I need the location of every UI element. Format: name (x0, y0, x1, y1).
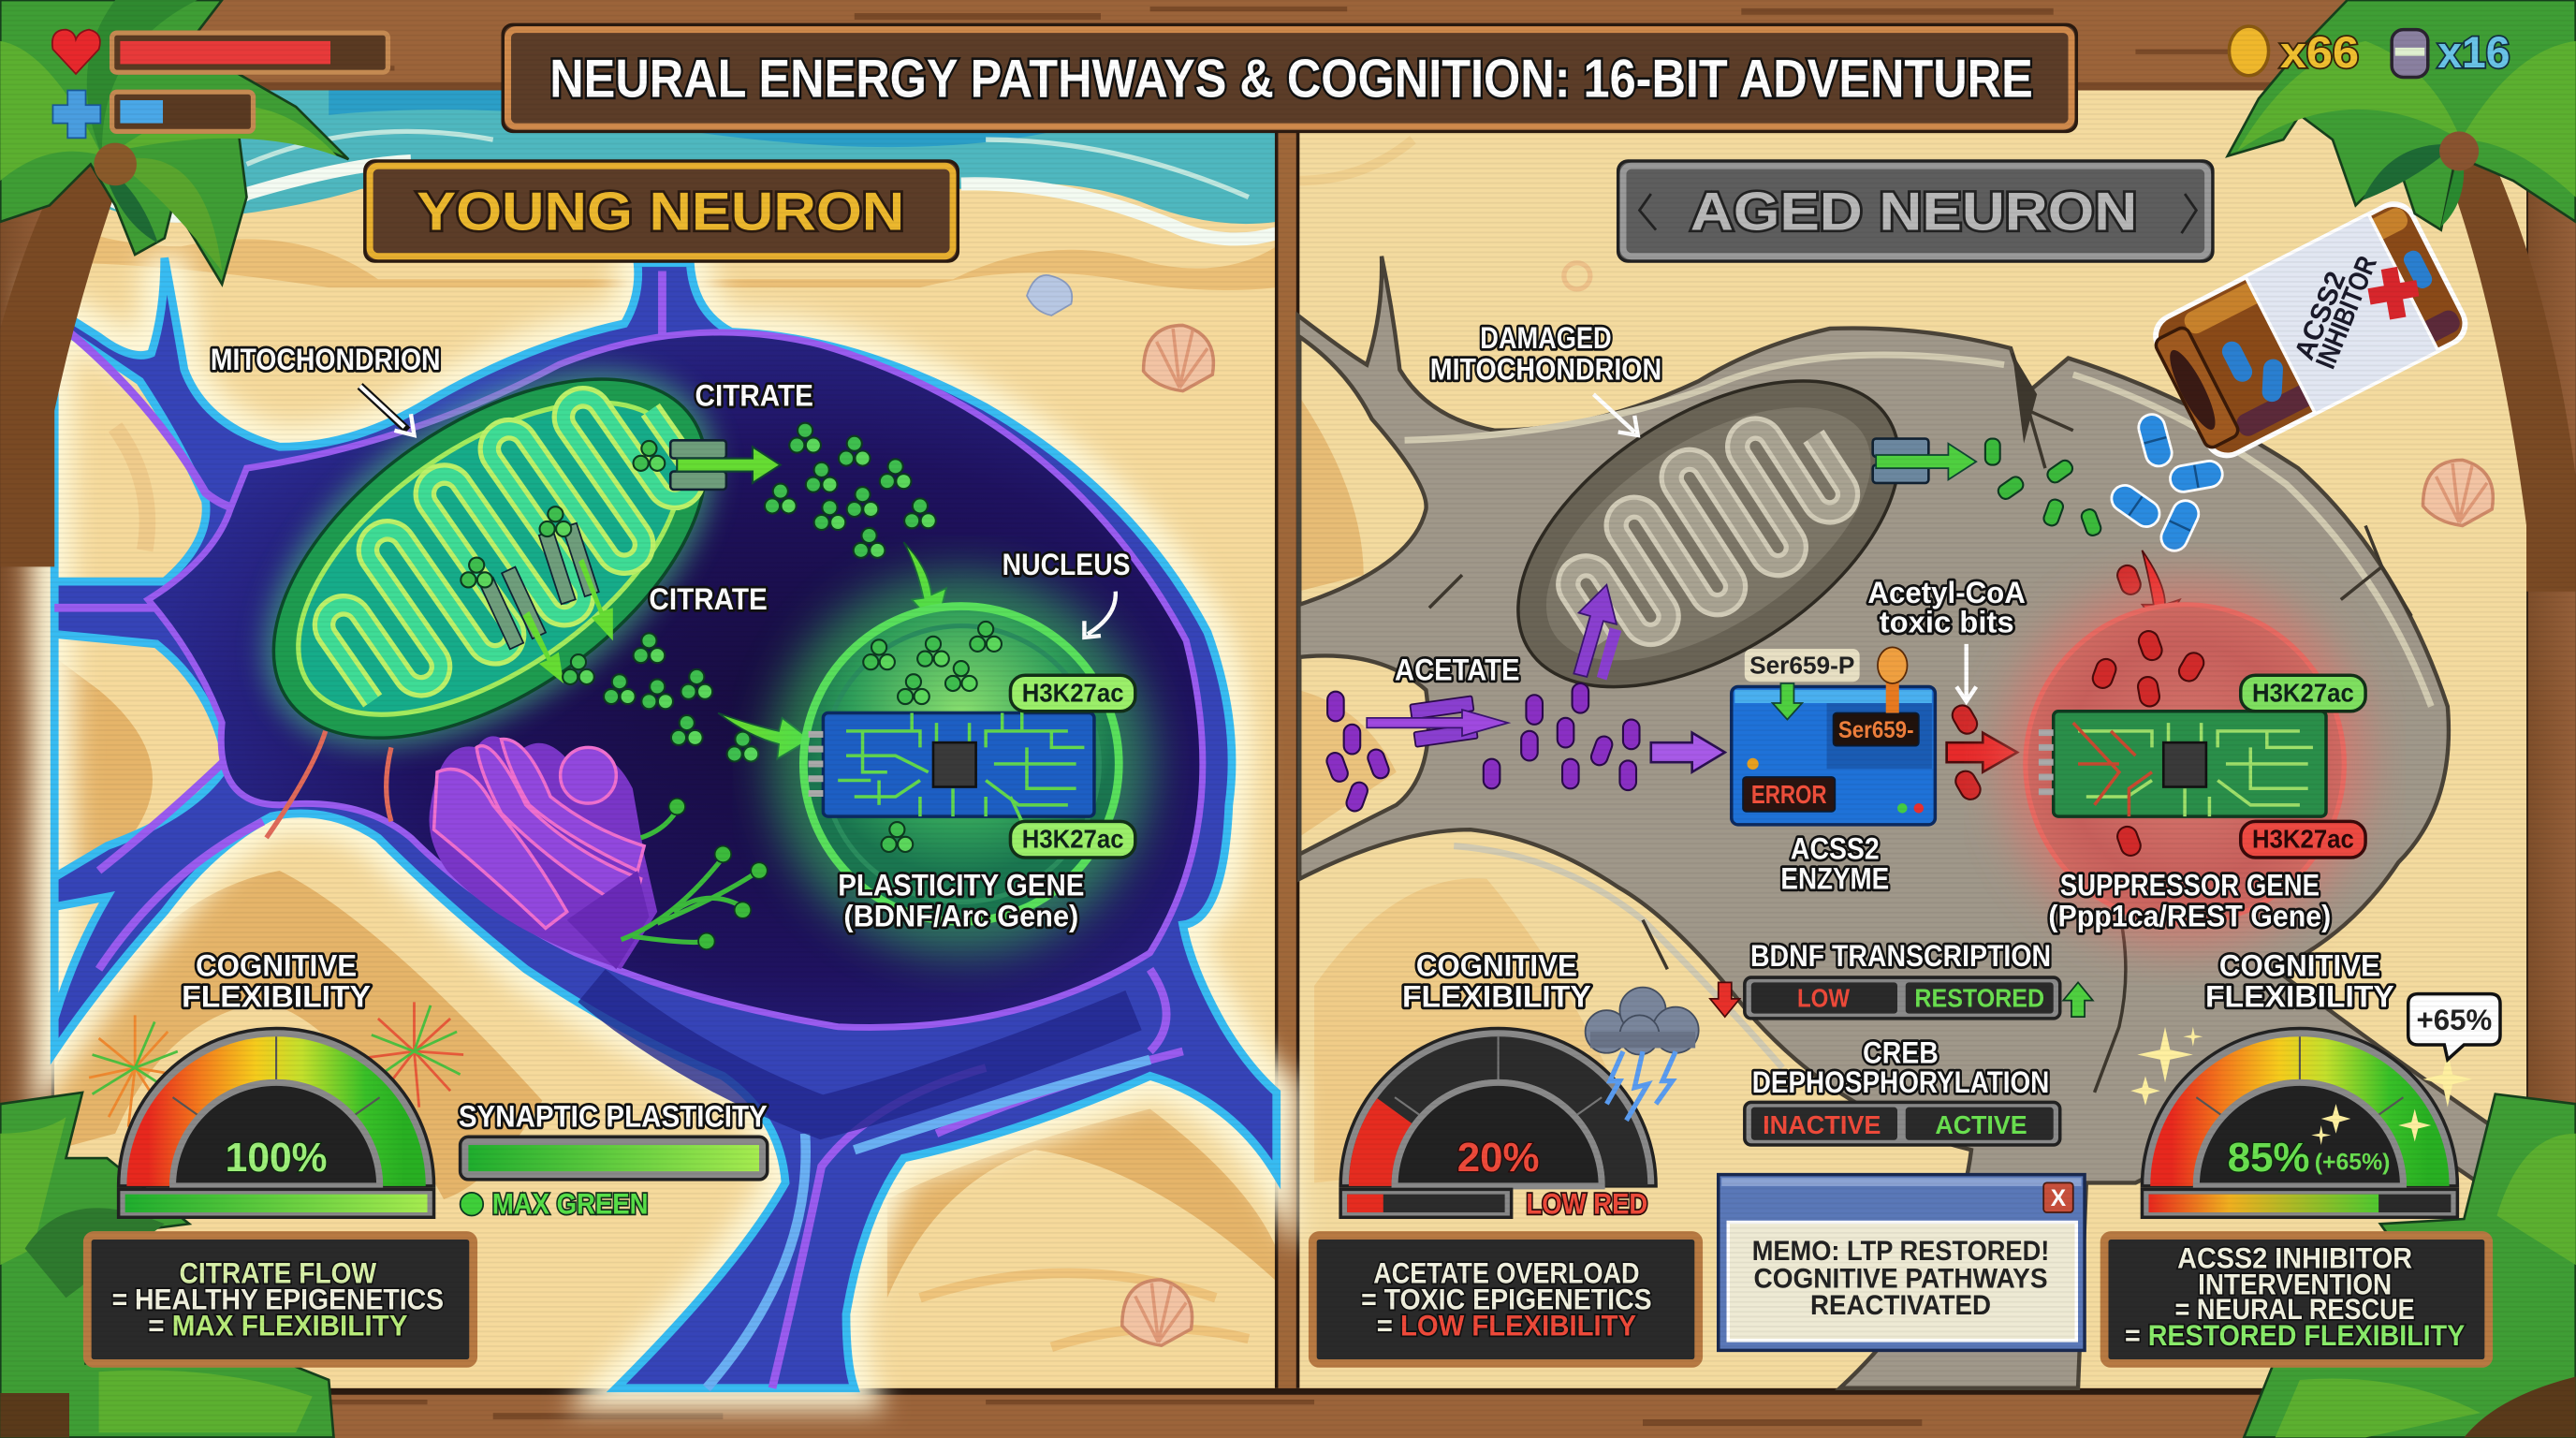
memo popup: MEMO: LTP RESTORED! (1752, 1236, 2049, 1267)
damaged mitochondrion (1465, 318, 1952, 749)
ocean (54, 91, 1277, 224)
heading: young neuron (365, 161, 958, 261)
label: damaged mitochondrion: MITOCHONDRION (1430, 352, 1661, 386)
label: nucleus: NUCLEUS (1003, 548, 1131, 581)
label: acetyl-coa toxic bits: Acetyl-CoA (1867, 576, 2026, 609)
status: bdnf transcription: LOW (1797, 984, 1851, 1013)
label: acetyl-coa toxic bits (1867, 576, 2026, 701)
bottle label: INHIBITOR (2310, 252, 2383, 374)
text box: acss2 inhibitor intervention: ACSS2 INHIBITOR (2177, 1241, 2412, 1275)
panel: young neuron beach background (54, 91, 1277, 1388)
H3K27ac tag top: H3K27ac (1022, 678, 1124, 707)
text box: citrate flow: CITRATE FLOW (180, 1255, 376, 1289)
gene chip (809, 713, 1094, 816)
small molecules aged (1325, 412, 2224, 814)
label: suppressor gene: (Ppp1ca/REST Gene) (2048, 900, 2331, 933)
HUD: health bar (52, 30, 388, 74)
label: acss2 enzyme (1780, 832, 1889, 895)
cell body (148, 332, 1203, 1028)
status: creb dephosphorylation: INACTIVE (1763, 1110, 1881, 1139)
label: COGNITIVE (196, 948, 357, 982)
label: suppressor gene (2048, 868, 2331, 933)
storm cloud (1586, 988, 1699, 1121)
error screen: ERROR (1751, 780, 1827, 809)
label: mitochondrion (211, 343, 441, 435)
error screen (1743, 777, 1835, 812)
memo popup: COGNITIVE PATHWAYS (1753, 1264, 2048, 1295)
label: citrate top: CITRATE (695, 378, 813, 412)
text box: acss2 inhibitor intervention (2104, 1236, 2489, 1363)
red nucleus with suppressor gene chip (2001, 580, 2369, 947)
status: bdnf transcription (1710, 939, 2093, 1019)
mitochondrion (197, 293, 783, 824)
panel: aged neuron beach background (1298, 91, 2526, 1388)
gauge: aged cognitive flexibility: FLEXIBILITY (1402, 980, 1591, 1014)
label: damaged mitochondrion: DAMAGED (1480, 321, 1612, 355)
fireworks (89, 1002, 463, 1127)
label: FLEXIBILITY (182, 980, 371, 1014)
close button: X (2051, 1186, 2067, 1211)
HUD: coins and potions (2229, 26, 2510, 78)
ACSS2 inhibitor bottle (2145, 194, 2476, 466)
text box: acetate overload (1312, 1236, 1699, 1363)
label: plasticity gene: (BDNF/Arc Gene) (843, 900, 1078, 933)
label: acetyl-coa toxic bits: toxic bits (1880, 606, 2014, 639)
close button (2043, 1182, 2073, 1212)
title: NEURAL ENERGY PATHWAYS & COGNITION: 16-BIT ADVENTURE (549, 50, 2033, 110)
label: suppressor gene: SUPPRESSOR GENE (2060, 868, 2320, 902)
H3K27ac tag red: H3K27ac (2252, 824, 2354, 853)
citrate molecules (461, 423, 936, 761)
bottle label: ACSS2 (2289, 268, 2352, 364)
top-left palm (0, 0, 348, 566)
text box: acss2 inhibitor intervention: INTERVENTION (2198, 1268, 2392, 1301)
label: acetate: ACETATE (1395, 653, 1519, 686)
lever (1878, 647, 1908, 713)
text box: citrate flow: = MAX FLEXIBILITY (148, 1309, 407, 1343)
center divider (1275, 91, 1299, 1388)
label: citrate lower: CITRATE (649, 582, 768, 616)
status: creb dephosphorylation: ACTIVE (1935, 1110, 2027, 1139)
synaptic plasticity meter: SYNAPTIC PLASTICITY (459, 1100, 768, 1134)
aged transporters and arrows (1367, 439, 2180, 772)
aged neuron cell (1298, 257, 2526, 1388)
gauge: aged cognitive flexibility: COGNITIVE (1416, 948, 1577, 982)
label: acss2 enzyme: ACSS2 (1791, 832, 1880, 866)
text box: citrate flow: = HEALTHY EPIGENETICS (112, 1283, 444, 1316)
+65% speech bubble: +65% (2416, 1003, 2492, 1036)
HUD: coins and potions: x16 (2437, 28, 2510, 78)
memo popup (1719, 1175, 2085, 1350)
nucleus with plasticity gene chip (770, 573, 1151, 954)
status: creb dephosphorylation: DEPHOSPHORYLATION (1752, 1065, 2049, 1099)
memo popup: REACTIVATED (1810, 1290, 1991, 1321)
gauge: aged cognitive flexibility: LOW RED (1526, 1187, 1647, 1221)
synaptic plasticity meter (459, 1100, 768, 1221)
HUD: coins and potions: x66 (2280, 28, 2359, 78)
ACSS2 enzyme console (1732, 647, 1935, 825)
gauge: aged cognitive flexibility (1340, 948, 1656, 1221)
H3K27ac tag bottom (1010, 797, 1135, 858)
text box: acss2 inhibitor intervention: = RESTORED FLEXIBILITY (2125, 1318, 2465, 1352)
citrate transporters and arrows (479, 440, 946, 759)
sparkles (2130, 1027, 2472, 1145)
H3K27ac tag green: H3K27ac (2252, 678, 2354, 707)
gauge: young cognitive flexibility (119, 948, 434, 1217)
text box: acetate overload: = LOW FLEXIBILITY (1377, 1309, 1636, 1343)
+65% speech bubble (2408, 994, 2500, 1060)
label: plasticity gene (838, 868, 1084, 933)
label (182, 948, 371, 1014)
gauge: restored cognitive flexibility: COGNITIVE (2219, 948, 2380, 982)
darker sand (54, 222, 1277, 290)
label: acss2 enzyme: ENZYME (1780, 861, 1889, 895)
gauge: restored cognitive flexibility (2142, 948, 2457, 1217)
green phospho arrow (1773, 683, 1802, 720)
status: creb dephosphorylation (1745, 1035, 2060, 1145)
title (503, 24, 2076, 131)
gauge: restored cognitive flexibility: 85% (2228, 1135, 2309, 1181)
gauge: restored cognitive flexibility: (+65%) (2315, 1150, 2390, 1175)
Ser659 display: Ser659- (1838, 718, 1914, 743)
label: nucleus (1003, 548, 1131, 638)
text box: citrate flow (87, 1236, 474, 1363)
halo (51, 257, 1277, 1388)
label: ser659-p: Ser659-P (1749, 651, 1854, 679)
text box: acetate overload: = TOXIC EPIGENETICS (1361, 1283, 1652, 1316)
golgi apparatus (267, 731, 768, 969)
label: mitochondrion: MITOCHONDRION (211, 343, 441, 376)
status: bdnf transcription: RESTORED (1914, 984, 2044, 1013)
gauge: restored cognitive flexibility: FLEXIBILITY (2205, 980, 2394, 1014)
shells (1027, 275, 2493, 1345)
bottom-right palm (2244, 1094, 2576, 1437)
HUD: mana bar (52, 91, 254, 138)
H3K27ac tag bottom: H3K27ac (1022, 824, 1124, 853)
status: creb dephosphorylation: CREB (1863, 1035, 1939, 1069)
text box: acss2 inhibitor intervention: = NEURAL RESCUE (2175, 1292, 2415, 1326)
bottom-left palm (0, 1093, 334, 1437)
label: plasticity gene: PLASTICITY GENE (838, 868, 1084, 902)
synaptic plasticity meter: MAX GREEN (492, 1187, 649, 1221)
gauge: young cognitive flexibility: 100% (226, 1135, 327, 1181)
text box: acetate overload: ACETATE OVERLOAD (1373, 1255, 1640, 1289)
young neuron cell (51, 257, 1277, 1388)
heading: aged neuron (1618, 161, 2213, 261)
suppressor chip (2039, 712, 2326, 816)
heading: young neuron: YOUNG NEURON (417, 183, 904, 242)
H3K27ac tag top (1010, 675, 1135, 731)
top-right palm (2228, 0, 2576, 592)
status: bdnf transcription: BDNF TRANSCRIPTION (1750, 939, 2051, 973)
neuron membrane and dendrites (54, 257, 1277, 1388)
bottle label (2289, 252, 2383, 374)
gauge: aged cognitive flexibility: 20% (1457, 1135, 1539, 1181)
heading: aged neuron: AGED NEURON (1690, 183, 2137, 242)
label: damaged mitochondrion (1430, 321, 1661, 435)
